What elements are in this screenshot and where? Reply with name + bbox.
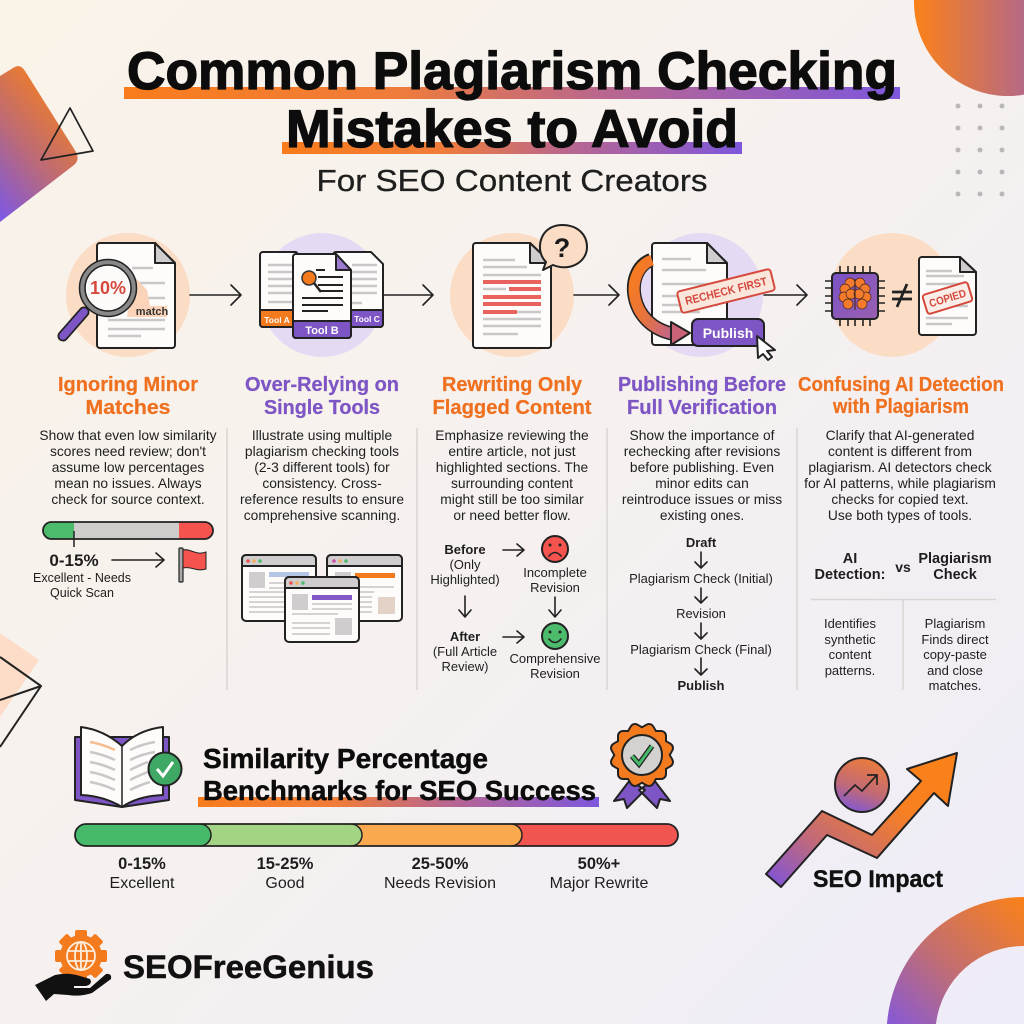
before and after revision flow: Revision	[530, 666, 580, 681]
column 5 body text: Use both types of tools.	[828, 508, 972, 523]
column 3 body text: or need better flow.	[453, 508, 571, 523]
column 5 body text: for AI patterns, while plagiarism	[804, 476, 996, 491]
icon: AI chip not equal to copied document: COPIED	[928, 288, 968, 310]
icon: SEO impact arrow	[766, 753, 957, 887]
column 2 body text: (2-3 different tools) for	[254, 460, 390, 475]
benchmark label: major rewrite: Major Rewrite	[550, 875, 648, 892]
benchmark label: major rewrite: 50%+	[578, 855, 620, 873]
decor: bottom right ring	[887, 897, 1024, 1024]
column 2 body text: reference results to ensure	[240, 492, 404, 507]
AI detection vs plagiarism comparison: Finds direct	[921, 632, 989, 647]
before and after revision flow: Before	[444, 542, 486, 557]
icon: recheck first before publish: Publish	[703, 325, 753, 341]
column 3 body text: surrounding content	[451, 476, 573, 491]
browser window mockups	[242, 555, 402, 642]
column 1 body text	[39, 428, 217, 507]
icon: three tool documents: Tool A	[264, 315, 290, 325]
before and after revision flow: Highlighted)	[430, 572, 500, 587]
benchmark label: good	[257, 855, 314, 892]
AI detection vs plagiarism comparison: vs	[895, 559, 911, 575]
column 5 body text	[804, 428, 996, 523]
benchmark label: major rewrite	[550, 855, 648, 892]
before and after revision flow: Comprehensive	[509, 651, 601, 666]
AI detection vs plagiarism comparison: and close	[927, 663, 983, 678]
subtitle: For SEO Content Creators	[316, 163, 708, 198]
arrow	[764, 285, 807, 305]
decor: dot grid	[956, 104, 1004, 196]
icon: three tool documents: Tool B	[305, 325, 339, 337]
benchmark label: needs revision: Needs Revision	[384, 875, 496, 892]
AI detection vs plagiarism comparison: Identifies	[824, 616, 877, 631]
arrow	[383, 285, 433, 305]
before and after revision flow: Review)	[442, 659, 488, 674]
column 5 heading	[798, 374, 1004, 418]
before and after revision flow	[430, 536, 601, 681]
before and after revision flow: Incomplete	[523, 565, 587, 580]
AI detection vs plagiarism comparison: matches.	[929, 678, 981, 693]
column 5 heading: with Plagiarism	[832, 396, 969, 418]
column 1 heading: Matches	[86, 397, 170, 419]
column 4 heading	[618, 374, 786, 419]
icon: document with highlighted lines and question bubble	[450, 225, 587, 357]
column 1 body text: Show that even low similarity	[39, 428, 217, 443]
benchmark label: excellent	[110, 855, 175, 892]
arrow	[190, 285, 241, 305]
column 1 body text: scores need review; don't	[50, 444, 206, 459]
column 3 body text: Emphasize reviewing the	[435, 428, 589, 443]
SEO impact label: SEO Impact	[813, 866, 943, 893]
AI detection vs plagiarism comparison: synthetic	[824, 632, 876, 647]
title: Mistakes to Avoid	[286, 100, 738, 159]
column 1 body text: check for source context.	[51, 492, 205, 507]
icon: recheck first before publish	[634, 233, 775, 360]
icon: magnifier over document with 10% match	[63, 233, 190, 357]
column 4 body text: before publishing. Even	[630, 460, 774, 475]
publishing workflow: Plagiarism Check (Initial)	[629, 571, 773, 586]
benchmark label: good: Good	[265, 875, 305, 892]
icon: open book with check	[75, 727, 182, 807]
section heading: similarity benchmarks: Similarity Percentage	[203, 743, 488, 774]
column 5 body text: Clarify that AI-generated	[826, 428, 974, 443]
column 4 body text: rechecking after revisions	[624, 444, 780, 459]
column 4 body text	[622, 428, 782, 523]
column 1 body text: mean no issues. Always	[54, 476, 202, 491]
benchmark label: needs revision	[384, 855, 496, 892]
column 3 body text: highlighted sections. The	[436, 460, 589, 475]
column 1 heading	[58, 374, 198, 419]
decor: top left gradient shape	[0, 66, 93, 222]
title	[124, 42, 900, 159]
similarity slider with flag: Quick Scan	[50, 586, 114, 600]
column 1 heading: Ignoring Minor	[58, 374, 198, 396]
AI detection vs plagiarism comparison: Detection:	[815, 567, 885, 583]
benchmark label: excellent: 0-15%	[118, 855, 166, 873]
icon: AI chip not equal to copied document	[825, 233, 976, 357]
AI detection vs plagiarism comparison: content	[829, 647, 872, 662]
column 3 heading	[432, 374, 592, 419]
column 3 heading: Flagged Content	[432, 397, 592, 419]
column 2 heading	[245, 374, 399, 419]
logo wordmark: SEOFreeGenius	[123, 949, 374, 985]
decor: lower left peach shape and triangle	[0, 633, 41, 747]
benchmark label: needs revision: 25-50%	[412, 855, 469, 873]
icon: magnifier over document with 10% match: 10%	[90, 278, 126, 298]
logo: gear, globe and hand	[35, 930, 111, 1001]
column 4 heading: Full Verification	[627, 397, 777, 419]
before and after revision flow: (Only	[449, 557, 481, 572]
column 4 body text: existing ones.	[660, 508, 744, 523]
column 5 heading: Confusing AI Detection	[798, 374, 1004, 396]
before and after revision flow: Revision	[530, 580, 580, 595]
column 4 body text: minor edits can	[655, 476, 749, 491]
column 2 body text: comprehensive scanning.	[244, 508, 400, 523]
icon: recheck first before publish: RECHECK FIRST	[684, 276, 768, 308]
publishing workflow: Publish	[678, 678, 725, 693]
before and after revision flow: (Full Article	[433, 644, 497, 659]
column 2 body text	[240, 428, 404, 523]
AI detection vs plagiarism comparison: Plagiarism	[925, 616, 985, 631]
icon: magnifier over document with 10% match: match	[136, 306, 168, 318]
section heading: similarity benchmarks	[198, 743, 599, 807]
column 2 body text: Illustrate using multiple	[252, 428, 392, 443]
publishing workflow: Plagiarism Check (Final)	[630, 642, 772, 657]
column 3 heading: Rewriting Only	[442, 374, 583, 396]
AI detection vs plagiarism comparison: patterns.	[825, 663, 875, 678]
icon: three tool documents: Tool C	[354, 314, 380, 324]
column 2 body text: plagiarism checking tools	[245, 444, 399, 459]
similarity slider with flag: 0-15%	[49, 551, 99, 570]
AI detection vs plagiarism comparison: AI	[843, 551, 857, 567]
icon: document with highlighted lines and question bubble: ?	[554, 233, 570, 263]
column 4 body text: reintroduce issues or miss	[622, 492, 782, 507]
similarity slider with flag: Excellent - Needs	[33, 571, 131, 585]
column 2 heading: Over-Relying on	[245, 374, 399, 396]
title: Common Plagiarism Checking	[127, 42, 897, 101]
decor: top right circle	[914, 0, 1024, 96]
arrow	[574, 285, 619, 305]
column 2 heading: Single Tools	[264, 397, 380, 419]
column 5 body text: content is different from	[828, 444, 972, 459]
column 3 body text	[435, 428, 589, 523]
column 2 body text: consistency. Cross-	[262, 476, 382, 491]
section heading: similarity benchmarks: Benchmarks for SEO Success	[203, 775, 596, 806]
column 1 body text: assume low percentages	[52, 460, 204, 475]
publishing workflow: Draft	[686, 535, 717, 550]
column 5 body text: checks for copied text.	[831, 492, 969, 507]
AI detection vs plagiarism comparison: copy-paste	[923, 647, 987, 662]
icon: three tool documents	[260, 233, 384, 357]
AI detection vs plagiarism comparison	[811, 551, 996, 693]
benchmark label: good: 15-25%	[257, 855, 314, 873]
benchmark bar	[75, 824, 678, 846]
benchmark label: excellent: Excellent	[110, 875, 175, 892]
before and after revision flow: After	[450, 629, 480, 644]
column 4 body text: Show the importance of	[630, 428, 775, 443]
publishing workflow: Revision	[676, 606, 726, 621]
similarity slider with flag	[33, 522, 213, 600]
column 3 body text: entire article, not just	[448, 444, 576, 459]
column 3 body text: might still be too similar	[440, 492, 584, 507]
column 4 heading: Publishing Before	[618, 374, 786, 396]
icon: award badge	[609, 722, 675, 808]
AI detection vs plagiarism comparison: Plagiarism	[918, 551, 992, 567]
AI detection vs plagiarism comparison: Check	[933, 567, 978, 583]
publishing workflow	[629, 535, 773, 693]
column 5 body text: plagiarism. AI detectors check	[808, 460, 992, 475]
